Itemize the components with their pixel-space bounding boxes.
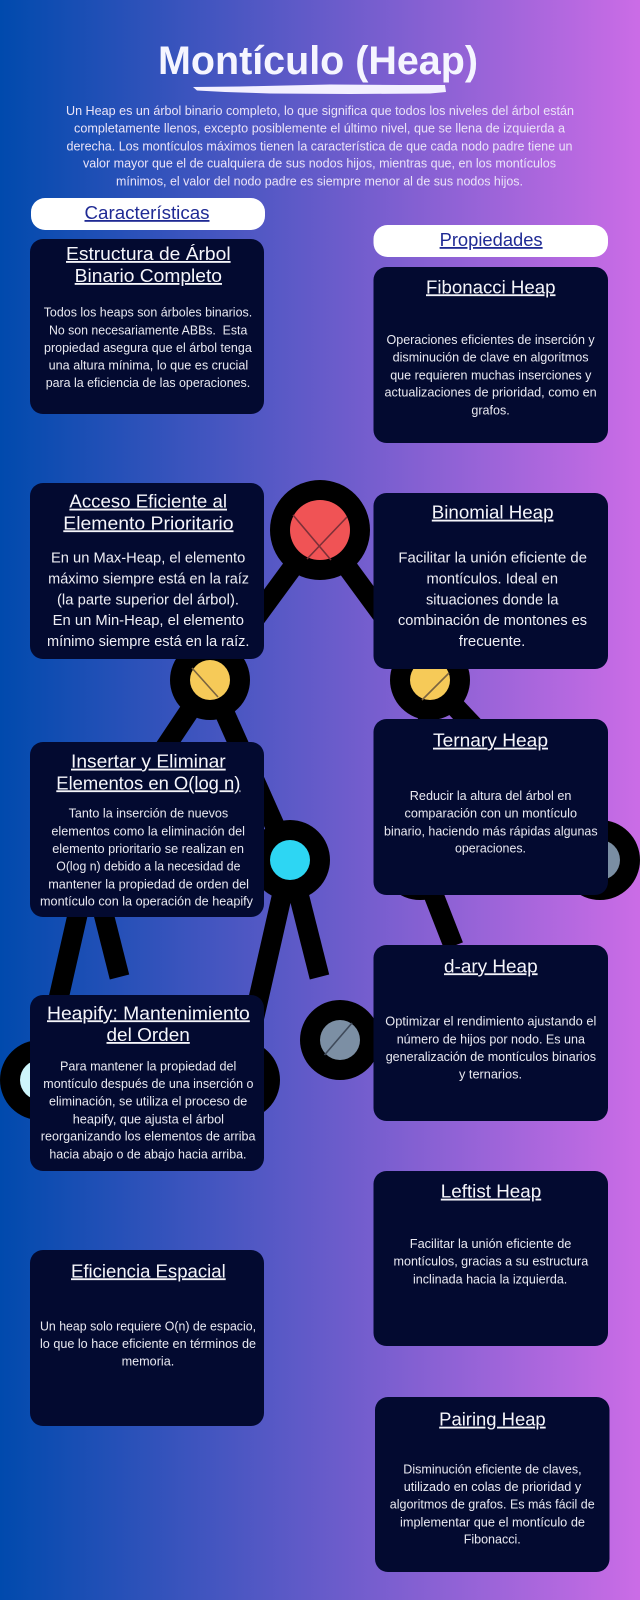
panel: Pairing Heap [375, 1397, 610, 1572]
card heading: Binario Completo [75, 265, 222, 286]
card body: utilizado en colas de prioridad y [404, 1479, 582, 1494]
card body: que requieren muchas inserciones y [390, 367, 592, 382]
card heading: Fibonacci Heap [426, 276, 556, 297]
card body: eliminación, se utiliza el proceso de [49, 1094, 247, 1109]
card body: mantener la propiedad de orden del [48, 876, 249, 891]
panel: Leftist Heap [374, 1171, 608, 1346]
card body: memoria. [122, 1354, 174, 1369]
card body [384, 332, 597, 417]
card body: generalización de montículos binarios [386, 1049, 596, 1064]
card body: Reducir la altura del árbol en [410, 788, 571, 803]
card body: algoritmos de grafos. Es más fácil de [390, 1497, 595, 1512]
card heading: del Orden [106, 1024, 190, 1045]
card body: mínimo siempre está en la raíz. [47, 634, 249, 650]
node: gray bottom [300, 1000, 380, 1080]
card body: máximo siempre está en la raíz [48, 572, 249, 588]
card body: lo que lo hace eficiente en términos de [40, 1336, 256, 1351]
card body: Optimizar el rendimiento ajustando el [385, 1014, 596, 1029]
card body [40, 1318, 256, 1369]
tree edges [40, 530, 600, 1080]
card heading [56, 751, 240, 793]
card body [44, 305, 253, 390]
card body: implementar que el montículo de [400, 1514, 585, 1529]
card heading: Ternary Heap [433, 730, 548, 751]
card body: Facilitar la unión eficiente de [398, 551, 587, 567]
card body: Un heap solo requiere O(n) de espacio, [40, 1318, 256, 1333]
card body: comparación con un montículo [404, 806, 577, 821]
node: hidden left [50, 820, 130, 900]
card body: hacia abajo o de abajo hacia arriba. [49, 1146, 247, 1161]
card body: Operaciones eficientes de inserción y [386, 332, 595, 347]
card body: una altura mínima, lo que es crucial [49, 357, 248, 372]
card heading [47, 1002, 250, 1045]
panel: Eficiencia Espacial [30, 1250, 264, 1426]
card body: (la parte superior del árbol). [57, 592, 239, 608]
card heading: d-ary Heap [444, 955, 538, 976]
panel: Ternary Heap [374, 719, 608, 895]
card heading: Elementos en O(log n) [56, 772, 240, 793]
card body: montículos, gracias a su estructura [394, 1254, 589, 1269]
panel: Heapify: Mantenimiento del Orden [30, 995, 264, 1171]
card body [41, 1058, 256, 1161]
card body: Facilitar la unión eficiente de [410, 1236, 571, 1251]
panel: Insertar y Eliminar Elementos en O(log n) [30, 742, 264, 917]
card body: reorganizando los elementos de arriba [41, 1129, 256, 1144]
card body: No son necesariamente ABBs. Esta [49, 322, 248, 337]
card body: O(log n) debido a la necesidad de [56, 859, 240, 874]
card heading: Pairing Heap [439, 1409, 546, 1430]
intro text: derecha. Los montículos máximos tienen la característica de que cada nodo padre tiene un [66, 138, 572, 153]
card heading: Heapify: Mantenimiento [47, 1002, 250, 1023]
card body: operaciones. [455, 841, 526, 856]
node: yellow left [170, 640, 250, 720]
node: hidden bottom [200, 1040, 280, 1120]
card body: inclinada hacia la izquierda. [413, 1271, 567, 1286]
node: cyan [250, 820, 330, 900]
panel: d-ary Heap [374, 945, 608, 1121]
card body: montículo después de una inserción o [43, 1076, 253, 1091]
card heading: Eficiencia Espacial [71, 1260, 226, 1281]
card body [40, 806, 254, 909]
intro text: Un Heap es un árbol binario completo, lo que significa que todos los niveles del árbol están [66, 103, 574, 118]
card body [394, 1236, 589, 1286]
panel: Estructura de Árbol Binario Completo [30, 239, 264, 414]
card heading: Leftist Heap [441, 1181, 541, 1202]
card body: grafos. [471, 402, 510, 417]
card heading: Insertar y Eliminar [71, 751, 226, 772]
card body: Para mantener la propiedad del [60, 1058, 236, 1073]
card body: elemento prioritario se realizan en [52, 841, 244, 856]
card body: disminución de clave en algoritmos [393, 350, 589, 365]
card heading [63, 491, 233, 533]
card body: binario, haciendo más rápidas algunas [384, 823, 598, 838]
card body [398, 551, 587, 650]
card body: montículos. Ideal en [426, 572, 558, 588]
heading pill: Características: Características [84, 203, 210, 223]
card body: frecuente. [459, 634, 525, 650]
card body: heapify, que ajusta el árbol [73, 1111, 224, 1126]
card body: actualizaciones de prioridad, como en [384, 385, 597, 400]
intro text: valor mayor que el de cualquiera de sus nodos hijos, mientras que, en los montículos [83, 156, 556, 171]
panel: Fibonacci Heap [374, 267, 608, 443]
card heading: Estructura de Árbol [66, 243, 231, 264]
card body: situaciones donde la [426, 592, 558, 608]
card body: para la eficiencia de las operaciones. [46, 375, 250, 390]
card body: Tanto la inserción de nuevos [69, 806, 228, 821]
card body: número de hijos por nodo. Es una [397, 1031, 586, 1046]
panel: Binomial Heap [374, 493, 608, 669]
tree diagram [0, 480, 640, 1120]
intro text [66, 103, 574, 188]
card body [384, 788, 598, 856]
card body: montículo con la operación de heapify [40, 894, 254, 909]
heading pill: Características [31, 198, 265, 230]
card heading: Binomial Heap [432, 502, 554, 523]
card body [390, 1461, 595, 1547]
card body [47, 551, 249, 650]
title brush underline [193, 84, 446, 94]
card body [385, 1014, 596, 1081]
card body: elementos como la eliminación del [51, 823, 245, 838]
node: gray right [560, 820, 640, 900]
card body: Disminución eficiente de claves, [403, 1461, 582, 1476]
panel: Acceso Eficiente al Elemento Prioritario [30, 483, 264, 659]
card body: combinación de montones es [398, 613, 587, 629]
card body: Todos los heaps son árboles binarios. [44, 305, 252, 320]
node: hidden centre right [380, 820, 460, 900]
node: yellow right [390, 640, 470, 720]
node: light blue [0, 1040, 80, 1120]
node: root red [270, 480, 370, 580]
intro text: mínimos, el valor del nodo padre es siempre menor al de sus nodos hijos. [116, 173, 523, 188]
intro text: completamente llenos, excepto posiblemente el último nivel, que se llena de izquierda a [74, 121, 566, 136]
card heading: Acceso Eficiente al [69, 491, 227, 512]
card body: En un Max-Heap, el elemento [51, 551, 245, 567]
card heading: Elemento Prioritario [63, 512, 233, 533]
card body: y ternarios. [459, 1066, 522, 1081]
card body: propiedad asegura que el árbol tenga [44, 340, 253, 355]
card heading [66, 243, 231, 286]
heading pill: Propiedades [374, 225, 608, 257]
card body: En un Min-Heap, el elemento [53, 613, 244, 629]
title: Montículo (Heap) [158, 39, 478, 83]
heading pill: Propiedades: Propiedades [440, 230, 543, 250]
card body: Fibonacci. [464, 1532, 521, 1547]
